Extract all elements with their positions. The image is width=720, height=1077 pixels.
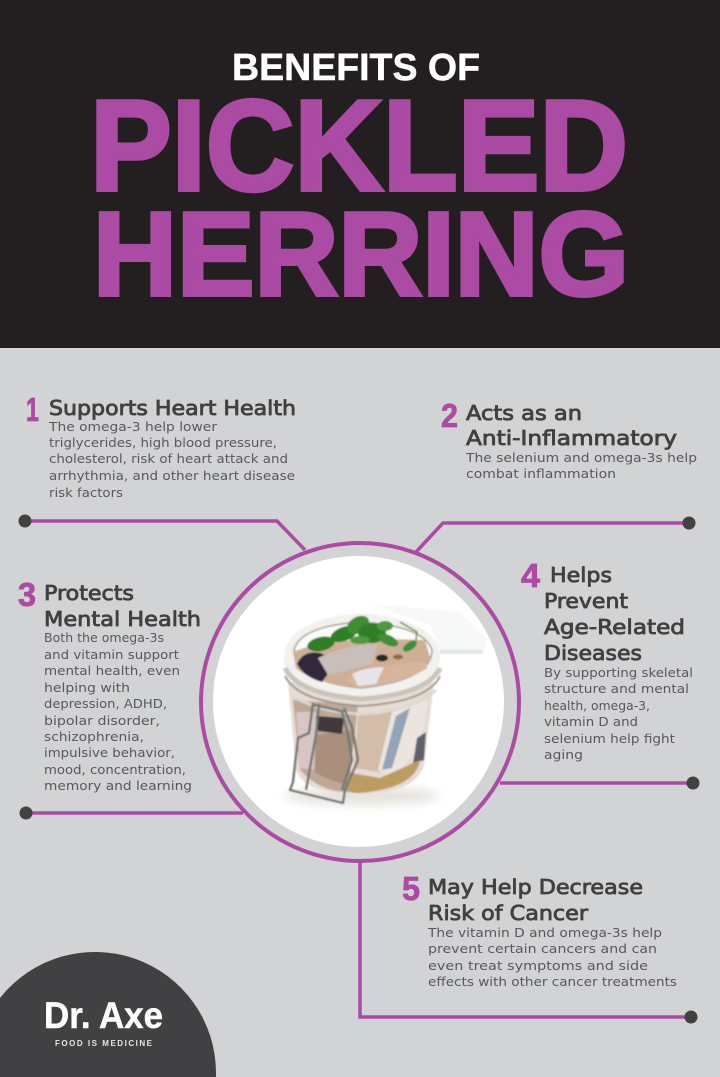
logo badge	[0, 952, 216, 1077]
text 1	[48, 419, 295, 500]
number 5: 5	[402, 870, 420, 907]
text 3	[44, 630, 192, 793]
text 2: The selenium and omega-3s help	[465, 450, 697, 465]
text 4: By supporting skeletal	[544, 665, 693, 680]
title: pickled: PICKLED	[90, 74, 628, 218]
text 1: The omega-3 help lower	[48, 419, 218, 434]
number 4: 4	[521, 557, 541, 594]
heading 4: Age-Related	[544, 615, 685, 639]
text 3: impulsive behavior,	[44, 745, 175, 760]
text 3: mood, concentration,	[44, 762, 186, 777]
heading 4: Helps	[550, 563, 612, 587]
text 1: cholesterol, risk of heart attack and	[49, 451, 288, 466]
text 5: prevent certain cancers and can	[428, 941, 657, 956]
number 1: 1	[26, 391, 39, 428]
benefit 5	[402, 870, 677, 989]
text 2	[465, 450, 697, 481]
photo: jar of pickled herring	[213, 556, 504, 847]
header panel	[0, 0, 720, 348]
number 2: 2	[441, 397, 458, 434]
benefit 4	[521, 557, 693, 762]
text 3: and vitamin support	[44, 647, 179, 662]
benefit 2	[441, 397, 697, 481]
text 3: bipolar disorder,	[44, 713, 160, 728]
text 3: mental health, even	[44, 663, 180, 678]
text 3: Both the omega-3s	[44, 630, 164, 645]
text 3: memory and learning	[44, 778, 192, 793]
text 4: structure and mental	[544, 681, 689, 696]
heading 3: Protects	[44, 581, 134, 605]
text 3: helping with	[44, 680, 130, 695]
text 4	[544, 665, 693, 762]
text 5	[427, 925, 677, 989]
logo tagline: FOOD IS MEDICINE	[55, 1039, 153, 1048]
text 3: schizophrenia,	[44, 729, 144, 744]
text 5: The vitamin D and omega-3s help	[427, 925, 662, 940]
heading 4	[544, 563, 685, 665]
heading 3: Mental Health	[44, 607, 201, 631]
text 4: aging	[544, 747, 583, 762]
text 5: even treat symptoms and side	[428, 958, 648, 973]
text 5: effects with other cancer treatments	[428, 974, 677, 989]
heading 3	[44, 581, 201, 631]
benefit 3	[18, 576, 201, 793]
title: benefits of: BENEFITS OF	[232, 47, 480, 89]
logo wordmark: Dr. Axe	[44, 995, 163, 1036]
text 1: arrhythmia, and other heart disease	[49, 468, 295, 483]
title: herring: HERRING	[93, 188, 629, 321]
text 2: combat inflammation	[466, 466, 616, 481]
heading 1: Supports Heart Health	[49, 396, 296, 420]
heading 5: Risk of Cancer	[428, 901, 589, 925]
heading 4: Prevent	[544, 589, 628, 613]
connector 2	[416, 516, 696, 552]
heading 2	[466, 401, 677, 450]
text 4: selenium help fight	[544, 731, 675, 746]
connector 3	[20, 806, 243, 820]
text 1: risk factors	[49, 485, 123, 500]
number 3: 3	[18, 576, 36, 613]
text 4: vitamin D and	[544, 714, 638, 729]
text 4: health, omega-3,	[544, 698, 650, 713]
heading 2: Acts as an	[466, 401, 582, 425]
heading 4: Diseases	[544, 641, 642, 665]
heading 2: Anti-Inflammatory	[466, 426, 677, 450]
connector 1	[18, 514, 305, 550]
heading 5	[428, 875, 643, 925]
connector 5	[360, 862, 698, 1024]
text 3: depression, ADHD,	[44, 696, 167, 711]
benefit 1	[26, 391, 296, 500]
text 1: triglycerides, high blood pressure,	[49, 435, 277, 450]
connector 4	[500, 776, 700, 790]
center ring	[201, 543, 519, 861]
heading 5: May Help Decrease	[428, 875, 643, 899]
logo: Dr. Axe	[0, 952, 216, 1077]
